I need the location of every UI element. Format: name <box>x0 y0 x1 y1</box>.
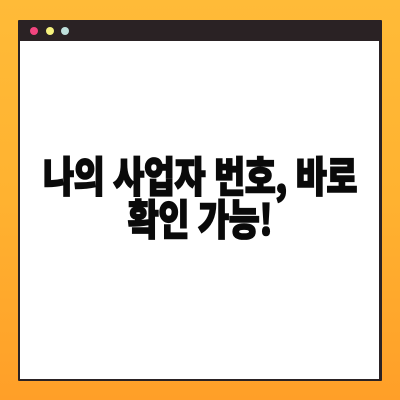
panel: white content area <box>20 41 379 379</box>
icon: pale blue window dot <box>61 27 69 35</box>
icon: yellow window dot <box>46 27 54 35</box>
icon: pink window dot <box>30 27 38 35</box>
title: 확인 가능! <box>128 187 272 248</box>
title: 나의 사업자 번호, 바로 <box>43 144 357 205</box>
title <box>43 144 357 248</box>
